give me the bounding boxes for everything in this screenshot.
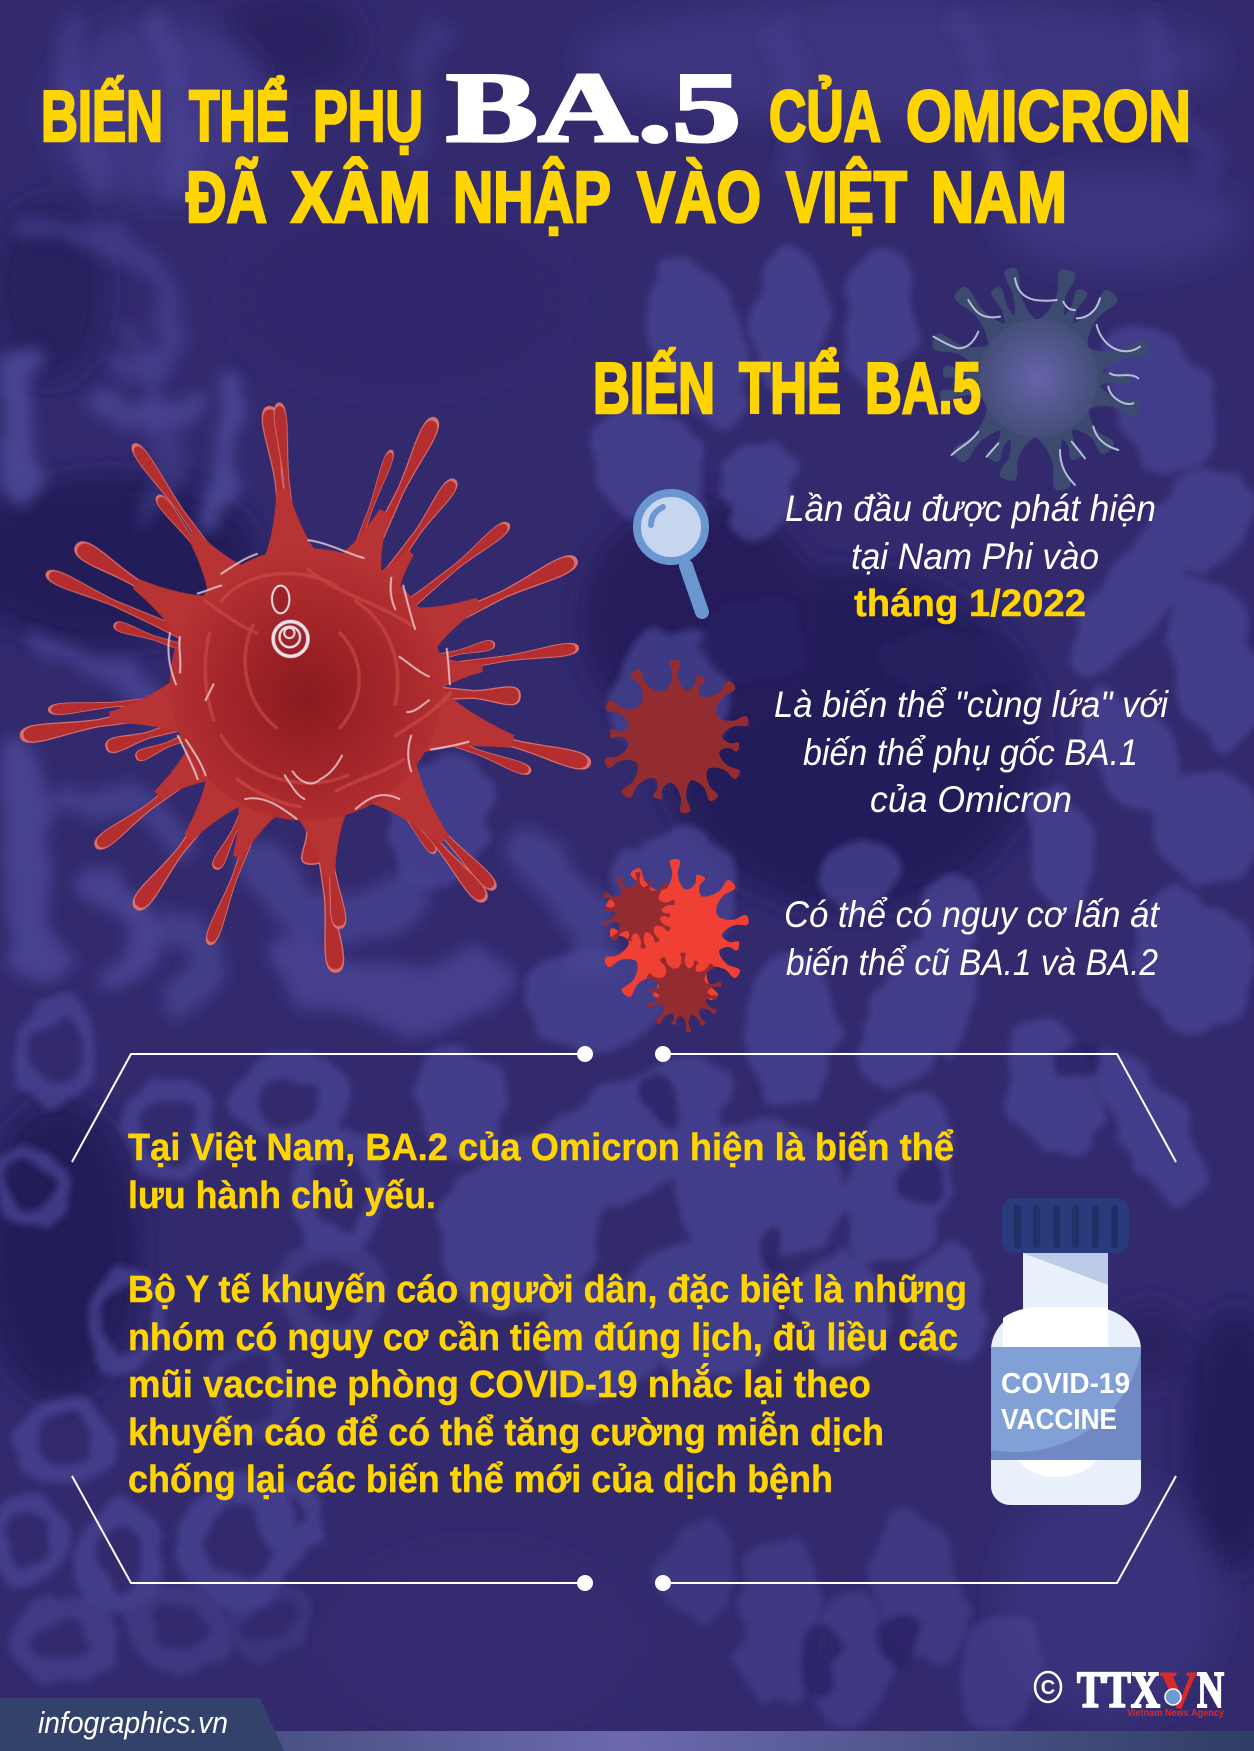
footer bar [0, 1698, 1254, 1751]
title: NHẬP [453, 157, 611, 238]
logo: TTXVN: C [1041, 1677, 1055, 1699]
logo: TTXVN: TTX [1077, 1662, 1160, 1719]
text: ministry of health recommendation: chống lại các biến thể mới của dịch bệnh [128, 1459, 833, 1501]
title: VIỆT [786, 157, 907, 238]
heading: biến thể BA.5: BA.5 [865, 349, 981, 429]
title: ĐÃ [186, 157, 267, 238]
logo: TTXVN: V [1160, 1662, 1198, 1719]
title [41, 52, 1191, 238]
text: situation in Vietnam [128, 1127, 954, 1217]
title: BIẾN [41, 76, 163, 157]
text: same lineage [774, 684, 1170, 820]
heading: biến thể BA.5: THỂ [739, 348, 841, 429]
text: may outcompete: biến thể cũ BA.1 và BA.2 [786, 942, 1158, 983]
text: ministry of health recommendation: khuyến cáo để có thể tăng cường miễn dịch [128, 1410, 884, 1454]
text: may outcompete: Có thể có nguy cơ lấn át [784, 894, 1161, 935]
title: CỦA [769, 76, 881, 157]
text: same lineage: của Omicron [870, 779, 1072, 820]
text: ministry of health recommendation: Bộ Y tế khuyến cáo người dân, đặc biệt là những [128, 1269, 967, 1311]
title: XÂM [291, 157, 431, 238]
logo: TTXVN: Vietnam News Agency [1127, 1708, 1224, 1719]
text: first detected [785, 488, 1156, 625]
heading: biến thể BA.5: BIẾN [593, 348, 715, 429]
icon: three bright red viruses [600, 859, 751, 1033]
icon: dark red virus [600, 660, 751, 815]
ring shapes, lower left [0, 1006, 380, 1676]
title: PHỤ [313, 77, 423, 157]
text: first detected: tại Nam Phi vào [851, 536, 1099, 577]
icon: vaccine bottle: VACCINE [1001, 1404, 1117, 1436]
red coronavirus illustration [20, 404, 591, 972]
title: BA.5 [446, 52, 741, 163]
text: ministry of health recommendation: nhóm có nguy cơ cần tiêm đúng lịch, đủ liều các [128, 1317, 958, 1359]
text: situation in Vietnam: Tại Việt Nam, BA.2 của Omicron hiện là biến thể [128, 1127, 954, 1169]
title: VÀO [637, 158, 761, 238]
text: same lineage: biến thể phụ gốc BA.1 [803, 732, 1138, 773]
text: ministry of health recommendation: mũi vaccine phòng COVID-19 nhắc lại theo [128, 1362, 871, 1406]
title: NAM [931, 158, 1067, 238]
icon: vaccine bottle [991, 1198, 1141, 1505]
icon: grey-blue virus behind heading [925, 263, 1155, 495]
text: may outcompete [784, 894, 1161, 983]
text: first detected: tháng 1/2022 [854, 583, 1086, 625]
title: OMICRON [906, 77, 1191, 157]
title: THỂ [189, 76, 289, 157]
text: first detected: Lần đầu được phát hiện [785, 488, 1156, 529]
logo: TTXVN [1035, 1662, 1224, 1719]
text: situation in Vietnam: lưu hành chủ yếu. [128, 1175, 436, 1217]
footer bar: infographics.vn [38, 1705, 228, 1740]
text: same lineage: Là biến thể "cùng lứa" với [774, 684, 1170, 725]
large virus lobes, right side [369, 241, 1254, 1735]
text: ministry of health recommendation [128, 1269, 967, 1501]
icon: vaccine bottle: COVID-19 [1001, 1368, 1130, 1400]
hexagonal frame [72, 1046, 1176, 1591]
heading: biến thể BA.5 [593, 348, 981, 429]
logo: TTXVN: N [1197, 1662, 1224, 1719]
icon: magnifying glass [637, 493, 705, 612]
